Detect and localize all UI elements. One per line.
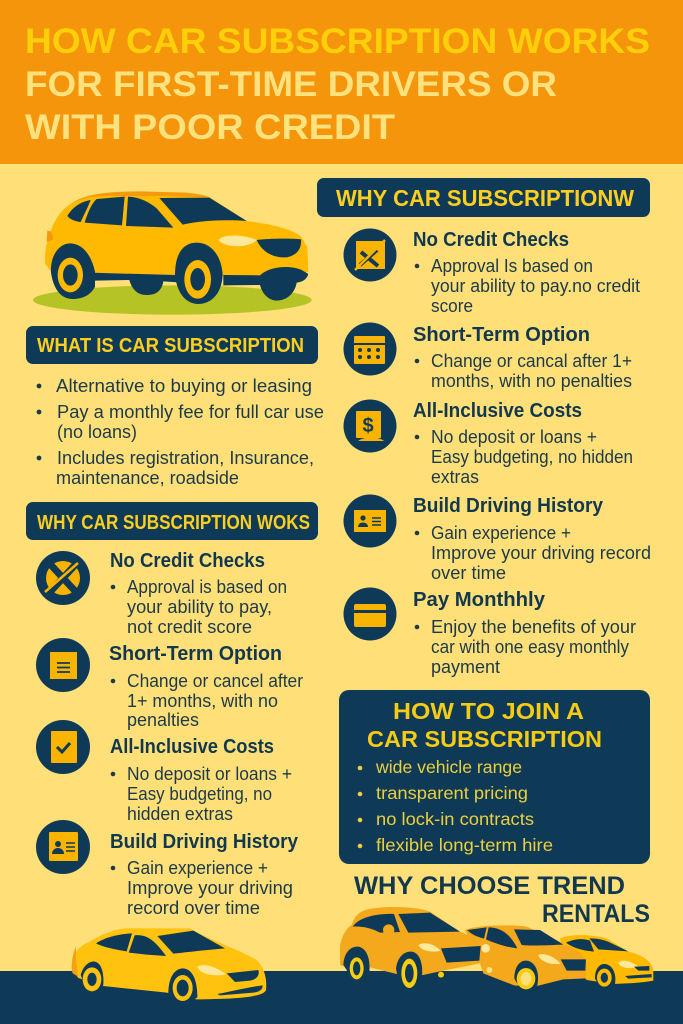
illustration: yellow SUV on green ground — [33, 191, 312, 315]
heading: why car subscription woks — [26, 502, 318, 540]
heading: why car subscriptionw: WHY CAR SUBSCRIPTIONW — [336, 185, 634, 211]
bullet list: definition: Includes registration, Insurance, — [57, 448, 314, 468]
text: all-inclusive costs: All-Inclusive Costs — [110, 736, 274, 758]
text: build driving history — [110, 831, 299, 918]
text: all-inclusive costs: extras — [431, 467, 479, 487]
heading: what is car subscription: WHAT IS CAR SUBSCRIPTION — [37, 335, 304, 357]
text: no credit checks: Approval Is based on — [431, 256, 593, 276]
title banner: WITH POOR CREDIT — [25, 108, 395, 147]
text: build driving history: Gain experience + — [431, 523, 571, 543]
text: build driving history: Gain experience + — [127, 858, 268, 878]
icon: no credit circle — [36, 551, 90, 605]
car: middle crossover — [465, 925, 587, 989]
text: no credit checks: No Credit Checks — [110, 550, 265, 572]
text: all-inclusive costs: hidden extras — [127, 804, 233, 824]
text: build driving history: Build Driving History — [110, 831, 299, 853]
panel: how to join a car subscription: wide vehicle range — [375, 757, 522, 777]
illustration: three rental cars — [340, 907, 653, 989]
icon: checklist — [36, 720, 90, 774]
title banner: HOW CAR SUBSCRIPTION WORKS — [25, 22, 650, 61]
icon: payment card — [344, 588, 396, 640]
panel: how to join a car subscription: HOW TO JOIN A — [393, 698, 584, 724]
text: build driving history: Improve your driving — [127, 878, 293, 898]
text: no credit checks: not credit score — [127, 617, 252, 637]
text: build driving history — [413, 495, 651, 583]
bullet list: definition: (no loans) — [57, 422, 137, 442]
text: no credit checks: your ability to pay.no credit — [431, 276, 640, 296]
text: short-term option: 1+ months, with no — [127, 691, 278, 711]
illustration: yellow sedan — [72, 928, 266, 1002]
text: no credit checks: your ability to pay, — [127, 597, 272, 617]
bullet list: definition — [37, 376, 324, 488]
text: short-term option — [109, 643, 303, 730]
bullet list: definition: Alternative to buying or leasing — [56, 376, 312, 396]
text: all-inclusive costs: Easy budgeting, no — [127, 784, 272, 804]
heading: why car subscription woks: WHY CAR SUBSCRIPTION WOKS — [37, 512, 310, 534]
icon: dollar bill: $ — [362, 415, 374, 437]
icon: calendar — [344, 322, 396, 376]
car: small hatchback — [560, 935, 653, 987]
text: short-term option: Change or cancel after — [127, 671, 303, 691]
bullet list: definition: Pay a monthly fee for full car use — [57, 402, 324, 422]
text: build driving history: Build Driving History — [413, 495, 604, 517]
panel: what is car subscription — [26, 326, 324, 488]
text: short-term option: Short-Term Option — [109, 643, 282, 665]
text: all-inclusive costs — [413, 400, 633, 487]
text: short-term option: Short-Term Option — [413, 324, 590, 346]
footer band — [0, 971, 683, 1024]
panel: why car subscription works (left) — [26, 502, 318, 918]
heading: what is car subscription — [26, 326, 318, 364]
panel: why car subscription (right) — [317, 178, 651, 677]
title banner: FOR FIRST-TIME DRIVERS OR — [25, 65, 557, 104]
text: no credit checks: score — [431, 296, 473, 316]
panel: how to join a car subscription: flexible long-term hire — [376, 835, 553, 855]
text: short-term option: penalties — [127, 710, 199, 730]
heading: why choose trend rentals: WHY CHOOSE TREND — [354, 872, 625, 900]
text: pay monthhly: payment — [431, 657, 500, 677]
text: build driving history: Improve your driving record — [431, 543, 651, 563]
text: pay monthhly: car with one easy monthly — [431, 637, 629, 657]
text: no credit checks — [110, 550, 287, 637]
heading: why choose trend rentals: RENTALS — [542, 900, 650, 928]
panel: how to join a car subscription — [339, 690, 650, 864]
icon: driving licence — [344, 494, 396, 548]
text: short-term option: months, with no penalties — [431, 371, 632, 391]
heading: why choose trend rentals — [354, 872, 650, 928]
text: pay monthhly — [413, 589, 636, 677]
icon: dollar bill — [344, 400, 396, 452]
panel: how to join a car subscription: transparent pricing — [376, 783, 528, 803]
text: no credit checks — [413, 229, 640, 316]
panel: how to join a car subscription: no lock-in contracts — [376, 809, 534, 829]
panel: how to join a car subscription: CAR SUBSCRIPTION — [367, 726, 602, 752]
icon: driver licence — [36, 820, 90, 874]
bullet list: definition: maintenance, roadside — [56, 468, 239, 488]
heading: why car subscriptionw — [317, 178, 650, 217]
text: pay monthhly: Pay Monthhly — [413, 589, 546, 611]
text: all-inclusive costs: No deposit or loans + — [127, 764, 292, 784]
text: short-term option — [413, 324, 632, 391]
text: short-term option: Change or cancal after 1+ — [431, 351, 632, 371]
text: build driving history: over time — [431, 563, 506, 583]
car: large SUV — [340, 907, 491, 988]
text: pay monthhly: Enjoy the benefits of your — [431, 617, 636, 637]
text: build driving history: record over time — [127, 898, 260, 918]
icon: crossed credit card — [344, 228, 396, 282]
icon: notepad — [36, 638, 90, 692]
text: all-inclusive costs — [110, 736, 292, 824]
text: all-inclusive costs: All-Inclusive Costs — [413, 400, 582, 422]
text: no credit checks: Approval is based on — [127, 577, 287, 597]
text: all-inclusive costs: No deposit or loans + — [431, 427, 597, 447]
text: all-inclusive costs: Easy budgeting, no hidden — [431, 447, 633, 467]
text: no credit checks: No Credit Checks — [413, 229, 569, 251]
title banner — [0, 0, 683, 164]
